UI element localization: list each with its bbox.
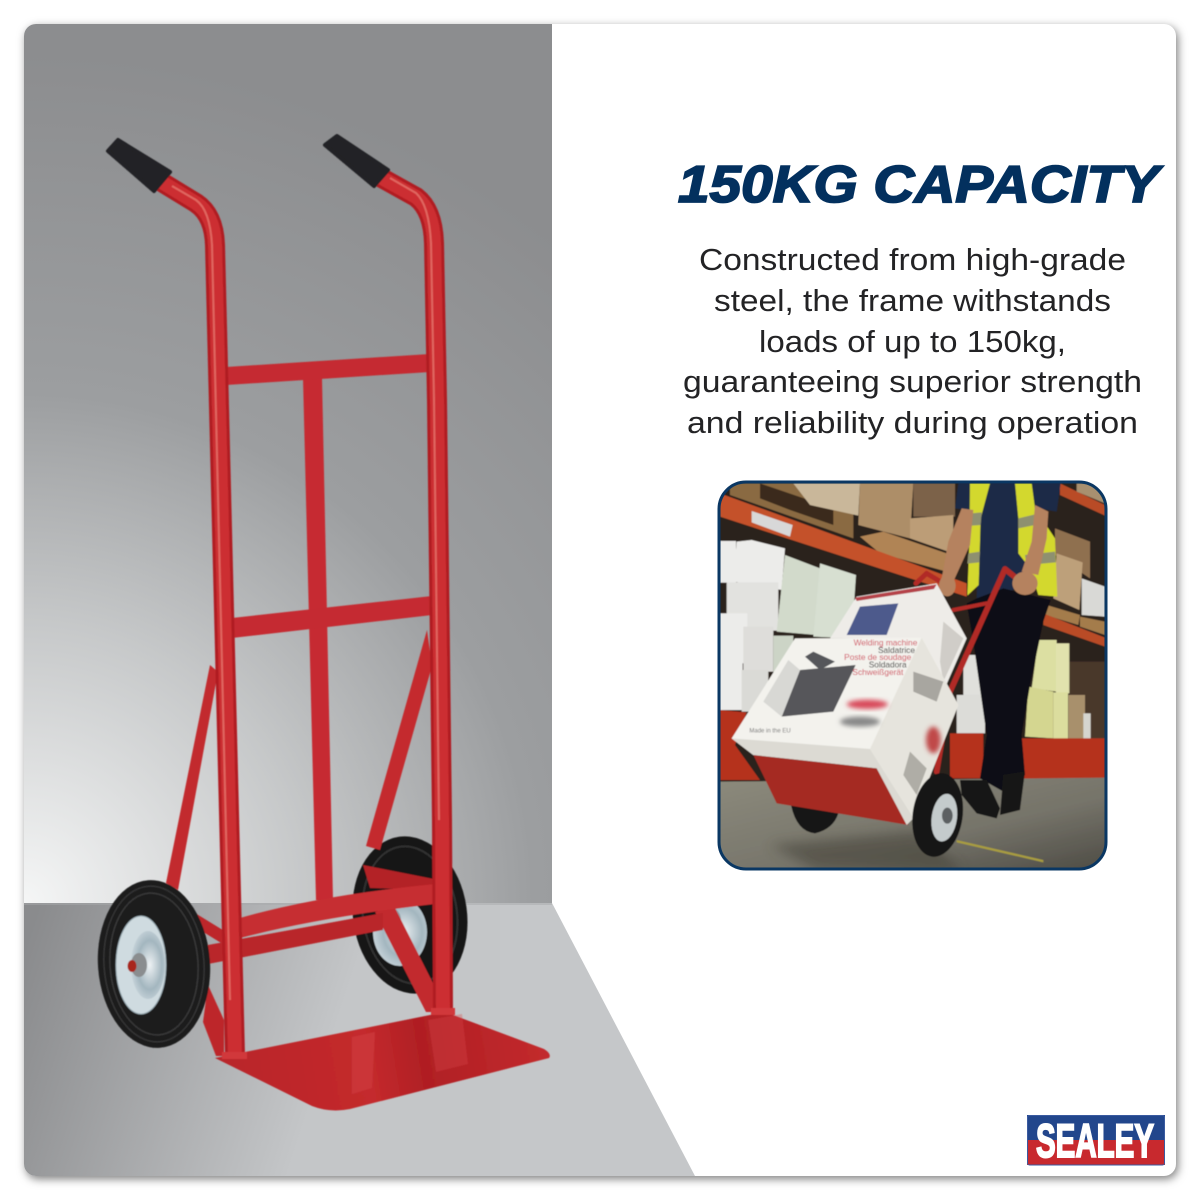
box label text: Soldadora <box>869 660 907 670</box>
base plate <box>215 1012 550 1110</box>
front wheel <box>92 876 216 1052</box>
lower braces <box>192 865 434 1056</box>
worker <box>942 483 1061 818</box>
rear trolley wheel <box>791 805 838 833</box>
box label text <box>749 638 918 734</box>
axle <box>208 913 383 964</box>
hands <box>939 572 1038 596</box>
left strut <box>166 665 218 890</box>
title: 150KG CAPACITY <box>678 156 1164 214</box>
right tube <box>380 177 443 1012</box>
body text: guaranteeing superior strength <box>683 364 1142 399</box>
body text: and reliability during operation <box>687 405 1138 440</box>
body text: loads of up to 150kg, <box>759 324 1066 359</box>
body text: steel, the frame withstands <box>714 283 1111 318</box>
middle crossbar <box>232 596 432 638</box>
white boxes and containers <box>720 540 1069 739</box>
photo: warehouse worker with trolley <box>717 480 1110 873</box>
red load plate <box>753 755 908 825</box>
warehouse shelving and stock <box>720 483 1105 742</box>
red spill pallets <box>720 710 1105 780</box>
body text: Constructed from high-grade <box>699 242 1126 277</box>
base plate weld and gloss <box>222 1008 468 1094</box>
centre strap <box>303 378 333 900</box>
front trolley wheel <box>912 773 964 858</box>
panel: studio backdrop <box>24 24 695 1176</box>
trolley frame <box>916 569 1022 772</box>
box label text: Welding machine <box>854 638 918 648</box>
box label text: Made in the EU <box>749 728 791 734</box>
front box <box>732 638 958 825</box>
upper crossbar <box>226 354 430 385</box>
warehouse floor <box>720 778 1105 870</box>
right grip <box>325 136 388 186</box>
photo border <box>719 482 1106 869</box>
body text <box>683 242 1142 440</box>
rear box <box>830 583 967 692</box>
left tube <box>160 181 235 1056</box>
box label text: Schweißgerät <box>852 667 904 677</box>
hand truck product image <box>92 136 550 1110</box>
back wheel <box>343 829 477 1001</box>
left grip <box>108 140 170 191</box>
box label text: Saldatrice <box>878 645 915 655</box>
box label text: Poste de soudage <box>844 652 912 662</box>
lower curved crossbar <box>240 884 435 938</box>
right strut <box>366 630 432 850</box>
